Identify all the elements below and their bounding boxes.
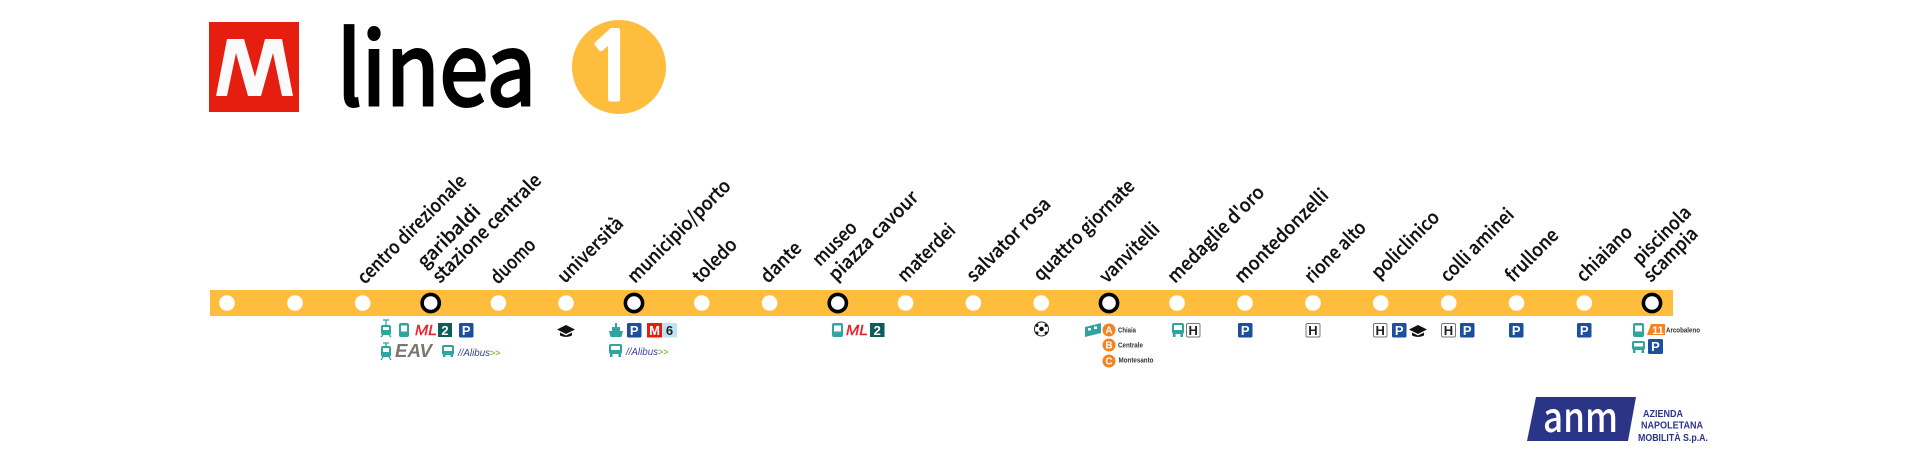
metro logo (209, 22, 299, 112)
services: colli aminei (1442, 323, 1474, 338)
station labels: policlinico (1365, 204, 1445, 284)
icon: hospital rione alto (1306, 323, 1320, 338)
icon: line 6 (647, 323, 677, 338)
funicular C: C (1105, 356, 1113, 368)
station labels: frullone (1499, 222, 1564, 287)
station labels: museo (806, 215, 862, 271)
icon: Alibus: >> (490, 348, 501, 358)
station labels: salvator rosa (960, 191, 1056, 287)
icon: bus 2 (1632, 341, 1645, 353)
icon: parking montedonzelli (1238, 323, 1252, 338)
icon: EAV logo: EAV (395, 341, 434, 361)
icon: bus (1172, 323, 1184, 337)
icon: Alibus: >> (658, 347, 669, 357)
station labels: scampia (1637, 221, 1703, 287)
services: vanvitelli funicular (1085, 323, 1154, 368)
funicular B: Centrale (1118, 342, 1143, 350)
station labels: garibaldi (411, 198, 486, 273)
station labels: colli aminei (1434, 202, 1519, 287)
icon: funicular (1085, 323, 1101, 337)
funicular A (1102, 324, 1136, 336)
icon: bus (399, 323, 409, 337)
station labels: piscinola (1626, 200, 1697, 270)
icon: bus (1633, 323, 1644, 337)
funicular C: Montesanto (1118, 358, 1154, 364)
icon: parking: P (1651, 339, 1660, 354)
icon: parking frullone: P (1512, 323, 1521, 338)
station labels: chiaiano (1570, 219, 1638, 287)
line number badge (572, 20, 666, 115)
ANM logo: AZIENDA (1643, 408, 1683, 420)
icon: parking frullone (1509, 323, 1524, 338)
icon: line 11 Arcobaleno: Arcobaleno (1666, 328, 1700, 334)
station labels (351, 167, 1703, 289)
stations (219, 295, 1592, 311)
funicular A: A (1105, 326, 1113, 336)
icon: line 2: 2 (874, 323, 881, 338)
station labels: stazione centrale (426, 167, 547, 288)
icon: line 6: M (649, 323, 660, 338)
icon: tram (381, 320, 391, 337)
services: municipio (609, 323, 677, 358)
icon: line 2: 2 (441, 323, 449, 338)
funicular C (1102, 354, 1154, 368)
icon: ship (609, 323, 623, 337)
interchange stations (422, 294, 1661, 312)
funicular A: Chiaia (1118, 328, 1136, 334)
station labels: piazza cavour (822, 184, 924, 286)
services: garibaldi (381, 320, 501, 361)
icon: Alibus: //Alibus (625, 347, 658, 358)
station labels: medaglie d'oro (1161, 179, 1270, 288)
icon: parking chiaiano: P (1580, 323, 1589, 338)
icon: line 11 Arcobaleno (1647, 324, 1700, 337)
ANM logo: NAPOLETANA (1641, 420, 1703, 432)
icon: line 11 Arcobaleno: 11 (1652, 325, 1664, 337)
services: policlinico (1374, 323, 1427, 338)
icon: parking: P (1395, 323, 1404, 338)
line number badge: 1 (584, 22, 640, 115)
icon: hospital: H (1444, 323, 1453, 338)
icon: parking montedonzelli: P (1241, 323, 1250, 338)
icon: parking: P (630, 323, 639, 338)
icon: hospital rione alto: H (1308, 323, 1318, 338)
services: piscinola (1632, 323, 1700, 354)
ANM logo: anm (1543, 384, 1618, 444)
station labels: montedonzelli (1228, 182, 1334, 288)
icon: hospital: H (1376, 323, 1385, 338)
station labels: municipio/porto (621, 173, 736, 288)
icon: parking chiaiano (1577, 323, 1592, 338)
funicular B: B (1105, 340, 1113, 352)
line bar (210, 290, 1673, 316)
services: università (557, 325, 575, 337)
ANM logo: MOBILITÀ S.p.A. (1638, 431, 1708, 444)
icon: bus 2 (442, 345, 454, 357)
icon: ML logo: ML (415, 322, 437, 339)
services: medaglie d'oro (1172, 323, 1200, 338)
icon: graduation cap (1409, 325, 1427, 337)
icon: graduation cap (557, 325, 575, 337)
funicular B (1102, 338, 1143, 352)
ANM logo (1527, 384, 1708, 444)
icon: hospital: H (1189, 323, 1198, 338)
icon: bus (832, 323, 843, 337)
station labels: centro direzionale (351, 168, 472, 289)
station labels: dante (754, 235, 807, 288)
station labels: rione alto (1298, 215, 1371, 288)
icon: Alibus: //Alibus (457, 348, 490, 359)
station labels: toledo (686, 232, 742, 288)
station labels: vanvitelli (1093, 216, 1165, 288)
station labels: materdei (891, 217, 961, 287)
icon: ML logo: ML (846, 322, 868, 339)
icon: parking: P (1463, 323, 1472, 338)
icon: football (1034, 322, 1048, 336)
icon: parking: P (462, 323, 471, 338)
services: museo (832, 322, 884, 339)
icon: tram 2 (381, 343, 391, 360)
icon: line 6: 6 (666, 323, 673, 338)
station labels: duomo (484, 232, 541, 289)
icon: bus (609, 344, 622, 357)
station labels: quattro giornate (1027, 173, 1140, 286)
station labels: università (551, 210, 629, 288)
